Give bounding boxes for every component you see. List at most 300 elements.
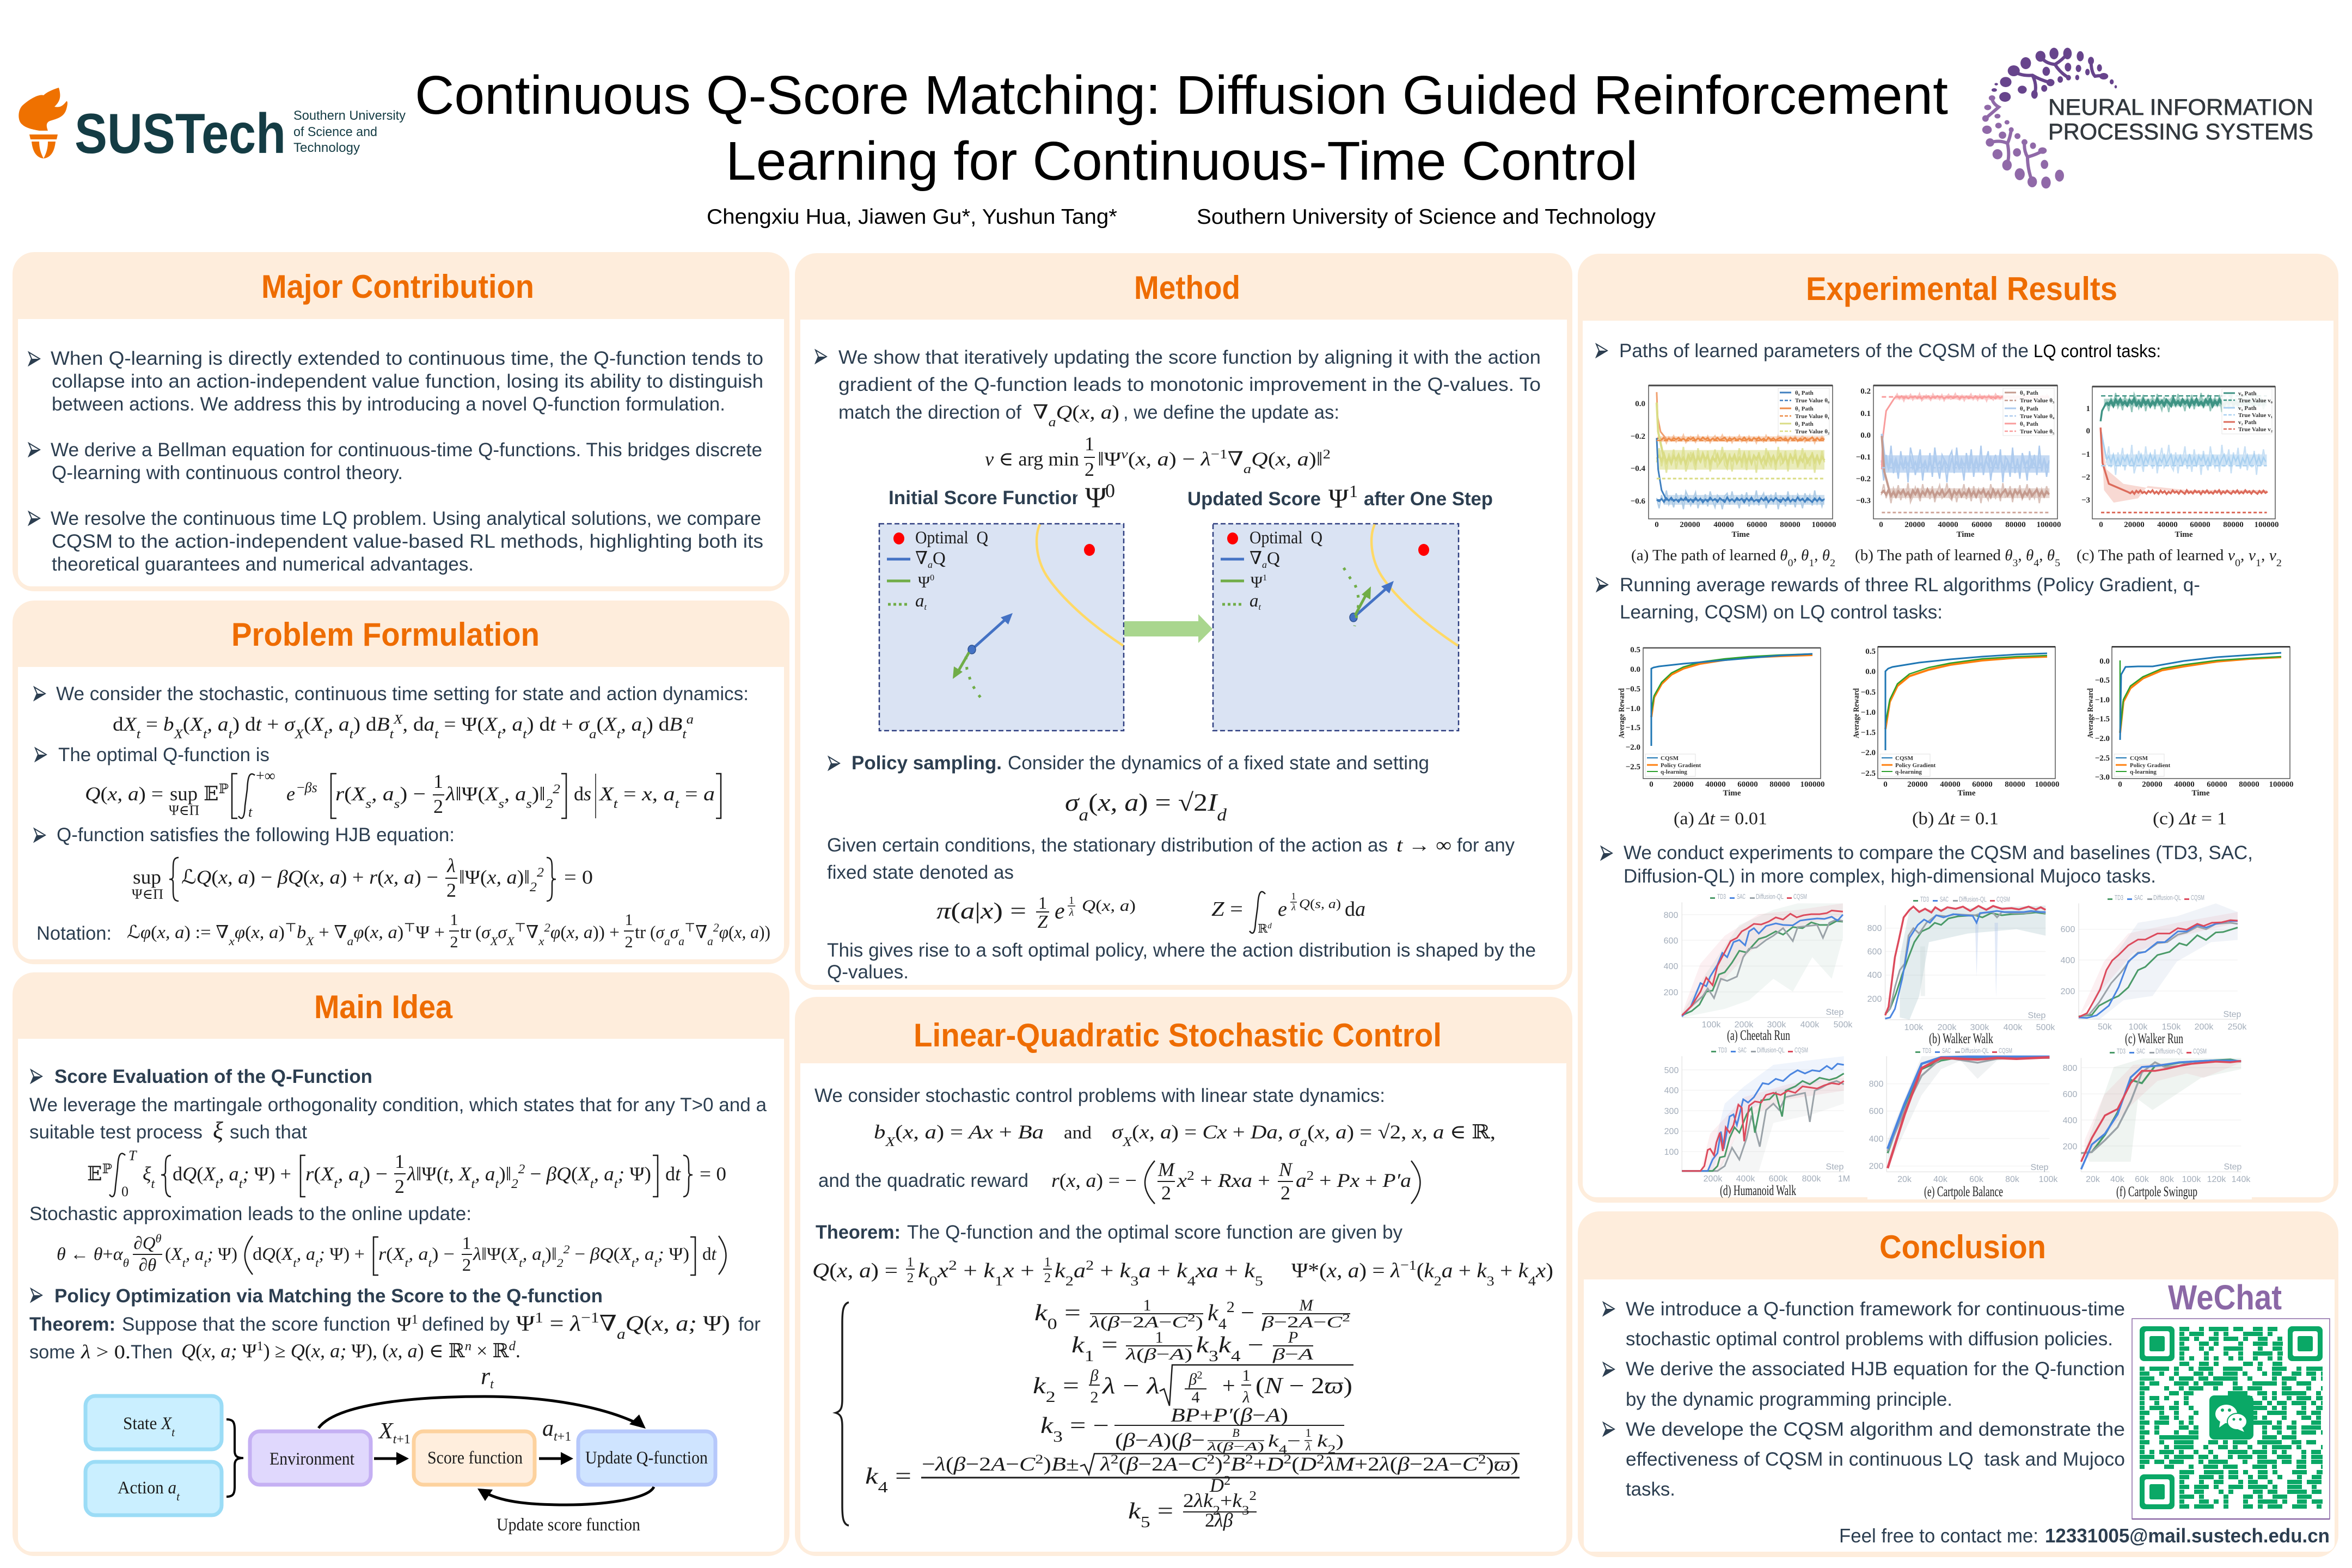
- chart: average reward dt 0.1: 40000: [1940, 780, 1961, 789]
- diagram: updated score: ∇: [1250, 549, 1262, 568]
- equation: stationary policy: 1: [1069, 895, 1074, 906]
- equation: optimal Q-function: −βs: [297, 780, 317, 795]
- box: Update Q-function: [578, 1431, 715, 1485]
- chart: Cheetah Run: 200: [1664, 988, 1678, 997]
- heading: Experimental Results: Experimental Results: [1806, 271, 2117, 307]
- chart: average reward dt 1: 40000: [2174, 780, 2195, 789]
- equation: optimal Q-function: Q(x, a) =: [85, 783, 163, 805]
- chart: average reward dt 1: Policy Gradient: [2130, 762, 2171, 769]
- equation: notation: 2: [450, 933, 458, 951]
- equation: k3: (β−A)(β−: [1115, 1429, 1205, 1451]
- chart: Walker Run: 250k: [2228, 1022, 2247, 1032]
- chart: path of theta 0,1,2: [1631, 385, 1836, 568]
- equation: optimal Q-function: t: [248, 804, 253, 820]
- chart: average reward dt 1: [2086, 647, 2293, 829]
- chart: average reward dt 0.01: (a) Δt = 0.01: [1674, 809, 1767, 829]
- text block: conclusions: We derive the associated HJB equation for the Q-function: [1626, 1358, 2125, 1380]
- chart: average reward dt 1: CQSM: [2130, 755, 2148, 762]
- text block: policy optimization theorem: [29, 1285, 761, 1363]
- chart: average reward dt 0.01: −2.0: [1626, 743, 1640, 752]
- chart: Humanoid Walk: [1664, 1046, 1850, 1198]
- subheading: updated score: Ψ: [1328, 483, 1349, 513]
- equation: optimal Q-function: λ‖Ψ(Xs, as)‖22: [445, 782, 560, 811]
- legend: [1711, 1046, 1808, 1054]
- equation: k1: k3k4 −: [1196, 1333, 1264, 1364]
- equation: k3: λ (β − A ): [1206, 1440, 1264, 1453]
- panel: Conclusion: [1578, 1211, 2338, 1557]
- chart: Cartpole Swingup: 40k: [2110, 1175, 2125, 1184]
- chart: Cartpole Balance: 200: [1869, 1162, 1883, 1171]
- text block: policy optimization theorem: Ψ1 = λ−1∇aQ(x, a; Ψ): [516, 1309, 730, 1342]
- equation: HJB: [132, 855, 593, 902]
- legend: SAC: [1737, 892, 1745, 901]
- chart: path of theta 0,1,2: 80000: [1780, 520, 1800, 529]
- equation: k0: M: [1299, 1296, 1314, 1314]
- equation: HJB: sup: [133, 866, 161, 888]
- equation: martingale orthogonality: λ‖Ψ(t, Xt, at)‖22 − βQ(Xt, at; Ψ): [407, 1162, 651, 1191]
- text block: stochastic approximation: Stochastic approximation leads to the online update:: [29, 1203, 471, 1224]
- equation: quadratic reward: N: [1278, 1159, 1293, 1180]
- equation: k1: P: [1288, 1328, 1298, 1346]
- equation: notation: Notation:: [36, 923, 112, 944]
- equation: HJB: = 0: [564, 866, 593, 888]
- chart: path of theta 3,4,5: −0.2: [1856, 475, 1871, 483]
- chart: average reward dt 0.01: 20000: [1673, 780, 1694, 789]
- equation: k2: 4: [1191, 1388, 1200, 1406]
- equation: k4: λ2(β−2A−C2)2B2+D2(D2λM +2λ(β−2A−C2)ϖ): [1100, 1451, 1518, 1475]
- chart: Cartpole Swingup: 400: [2063, 1116, 2077, 1125]
- equation: k2: β: [1090, 1367, 1099, 1385]
- equation: martingale orthogonality: dt: [665, 1163, 681, 1185]
- equation: HJB: ‖Ψ(x, a)‖22: [459, 865, 544, 894]
- chart: average reward dt 0.01: −0.5: [1626, 685, 1640, 694]
- text block: HJB: Q-function satisfies the following HJB equation:: [57, 824, 455, 846]
- chart: Cartpole Balance: 60k: [1969, 1175, 1984, 1184]
- text block: soft optimal policy: Q-values.: [827, 961, 909, 983]
- chart: Cartpole Balance: 80k: [2005, 1175, 2020, 1184]
- arrow: initial to updated: [1124, 614, 1212, 643]
- equation: k5: 2λk2+k32: [1183, 1489, 1257, 1518]
- text block: score evaluation: We leverage the martingale orthogonality condition, which states that for any T>0 and a: [29, 1094, 767, 1116]
- equation: HJB: Ψ∈Π: [132, 886, 163, 902]
- chart: Humanoid Walk: 200k: [1704, 1174, 1723, 1184]
- chart: average reward dt 0.01: 0.5: [1630, 646, 1640, 654]
- legend: [1710, 892, 1807, 901]
- equation: k3: k2): [1317, 1431, 1344, 1456]
- logo: SUSTech: [19, 88, 406, 166]
- text block: stationary distribution: Given certain conditions, the stationary distribution of the action as: [827, 835, 1388, 856]
- equation: k1: k1 =: [1071, 1333, 1118, 1364]
- equation: k2: λ: [1242, 1388, 1250, 1406]
- chart: path of theta 3,4,5: [1855, 385, 2061, 568]
- equation: Q-function and optimal score: 1: [907, 1255, 914, 1270]
- chart: Cartpole Balance: 100k: [2039, 1175, 2058, 1184]
- panel: Major Contribution: [13, 252, 789, 591]
- chart: path of theta 3,4,5: 60000: [1971, 520, 1992, 529]
- equation: k3: 1: [1306, 1426, 1311, 1440]
- chart: Walker Run: 150k: [2162, 1022, 2181, 1032]
- chart: path of theta 3,4,5: True Value θ₄: [2020, 413, 2055, 420]
- equation: k3: [1040, 1404, 1344, 1456]
- text block: LQ theorem: Theorem:: [816, 1222, 901, 1243]
- label: a t+1: +1: [558, 1430, 571, 1444]
- text block: conclusions: [1603, 1298, 2125, 1500]
- chart: path of theta 3,4,5: 0: [1879, 520, 1883, 529]
- text block: Mujoco experiments: Diffusion-QL) in more complex, high-dimensional Mujoco tasks.: [1624, 866, 2156, 887]
- chart: average reward dt 0.01: 100000: [1800, 780, 1825, 789]
- label: X t+1: +1: [396, 1432, 411, 1447]
- equation: k4: −λ(β−2A−C2)B±: [922, 1451, 1079, 1475]
- text block: conclusions: We develope the CQSM algorithm and demonstrate the: [1626, 1419, 2125, 1440]
- chart: path of v 0,1,2: v₂ Path: [2238, 419, 2257, 426]
- chart: average reward dt 0.01: 80000: [1769, 780, 1790, 789]
- chart: path of theta 3,4,5: θ₄ Path: [2020, 406, 2038, 412]
- legend: TD3: [1920, 895, 1929, 903]
- chart: Cartpole Swingup: 100k: [2182, 1175, 2201, 1184]
- equation: online update: θ ← θ+αθ: [57, 1245, 129, 1270]
- equation: online update: ∂Qθ: [133, 1232, 162, 1253]
- diagram: updated score: Q: [1267, 549, 1280, 568]
- chart: Cheetah Run: Step: [1826, 1008, 1844, 1017]
- chart: average reward dt 1: 80000: [2239, 780, 2259, 789]
- chart: Cartpole Swingup: (f) Cartpole Swingup: [2116, 1184, 2197, 1199]
- chart: path of theta 3,4,5: 40000: [1938, 520, 1958, 529]
- chart: path of v 0,1,2: True Value v₂: [2238, 426, 2273, 433]
- equation: optimal Q-function: sup: [170, 783, 198, 805]
- chart: average reward dt 1: (c) Δt = 1: [2153, 809, 2227, 829]
- equation: Q-function and optimal score: Q(x, a) =: [812, 1259, 898, 1282]
- title: [415, 65, 1948, 192]
- equation: Q-function and optimal score: 1: [1044, 1255, 1051, 1270]
- chart: path of v 0,1,2: v₁ Path: [2238, 405, 2257, 412]
- chart: Humanoid Walk: 800k: [1802, 1174, 1821, 1184]
- equation: k2: β2: [1188, 1369, 1203, 1388]
- text block: policy optimization theorem: some: [29, 1342, 75, 1363]
- equation: optimal Q-function: 𝔼ℙ: [204, 782, 229, 805]
- equation: Q-function and optimal score: 2: [907, 1271, 914, 1285]
- chart: Cheetah Run: 400: [1664, 962, 1678, 971]
- chart: average reward dt 1: 100000: [2269, 780, 2293, 789]
- subheading: updated score: after One Step: [1364, 488, 1493, 510]
- equation: k2: 2: [1090, 1388, 1099, 1406]
- chart: path of v 0,1,2: True Value v₀: [2238, 397, 2273, 404]
- chart: average reward dt 0.1: −0.5: [1861, 688, 1876, 697]
- text block: LQ intro: We consider stochastic control problems with linear state dynamics:: [814, 1085, 1385, 1106]
- equation: k3: k3 = −: [1040, 1413, 1109, 1445]
- legend: CQSM: [1999, 1046, 2012, 1055]
- equation: k2: +: [1222, 1374, 1235, 1399]
- chart: Cartpole Swingup: 600: [2063, 1090, 2077, 1099]
- legend: CQSM: [2193, 1047, 2207, 1055]
- equation: k2: 1: [1242, 1367, 1250, 1385]
- chart: Cartpole Swingup: [2063, 1047, 2251, 1199]
- text block: contribution bullets: Q-learning with continuous control theory.: [52, 462, 403, 483]
- chart: average reward dt 0.1: CQSM: [1895, 755, 1914, 762]
- equation: martingale orthogonality: [87, 1148, 726, 1199]
- legend: Diffusion-QL: [1959, 895, 1987, 903]
- text block: score update: gradient of the Q-function leads to monotonic improvement in the Q-values. To: [838, 374, 1541, 395]
- subheading: updated score: [1187, 481, 1493, 513]
- logo: SUSTech: Southern University: [293, 108, 406, 123]
- text block: score evaluation: Score Evaluation of the Q-Function: [54, 1066, 372, 1087]
- equation: k3: BP +P′(β−A): [1171, 1404, 1288, 1426]
- arrow: score to update: [539, 1452, 573, 1465]
- heading: Problem Formulation: Problem Formulation: [231, 616, 540, 653]
- chart: Cartpole Balance: 400: [1869, 1135, 1883, 1144]
- label: r t: t: [490, 1377, 494, 1392]
- chart: average reward dt 1: Time: [2191, 789, 2210, 798]
- equation: martingale orthogonality: r(Xt, at) −: [305, 1163, 388, 1191]
- equation: notation: 1: [450, 911, 458, 929]
- equation: k0: k42 −: [1208, 1299, 1254, 1333]
- chart: average reward dt 1: −0.5: [2095, 676, 2110, 685]
- legend: CQSM: [1793, 892, 1807, 901]
- equation: linear dynamics: σX(x, a) = Cx + Da, σ a(x, a) = √2, x, a ∈ ℝ,: [1112, 1121, 1496, 1149]
- chart: Walker Run: (c) Walker Run: [2125, 1031, 2183, 1046]
- chart: Cheetah Run: 800: [1664, 911, 1678, 920]
- equation: optimal Q-function: e: [286, 783, 295, 805]
- text block: contribution bullets: We derive a Bellman equation for continuous-time Q-functions. This bridges discrete: [51, 439, 762, 461]
- subheading: updated score: 1: [1349, 481, 1358, 501]
- text block: score update: , we define the update as:: [1123, 402, 1339, 423]
- chart: path of v 0,1,2: 20000: [2124, 520, 2145, 529]
- chart: average reward dt 0.1: 20000: [1907, 780, 1928, 789]
- equation: k1: 1: [1155, 1328, 1163, 1346]
- text block: paths of learned parameters: Paths of learned parameters of the CQSM of the: [1619, 340, 2029, 362]
- equation: online update: λ‖Ψ(Xt, at)‖22 − βQ(Xt, at; Ψ): [473, 1242, 689, 1270]
- chart: average reward dt 0.01: CQSM: [1661, 755, 1679, 762]
- box: Score function: [414, 1431, 535, 1485]
- box: Update Q-function: Update Q-function: [585, 1448, 708, 1468]
- chart: average reward dt 0.01: Policy Gradient: [1661, 762, 1701, 769]
- chart: average reward dt 0.1: 100000: [2035, 780, 2059, 789]
- diagram: initial score: Ψ: [918, 573, 930, 591]
- equation: stationary policy: π(a|x) =: [936, 899, 1026, 924]
- legend: [1915, 1046, 2012, 1055]
- equation: notation: (σaσa⊤∇a2φ(x, a)): [650, 920, 770, 947]
- chart: Humanoid Walk: (d) Humanoid Walk: [1720, 1183, 1796, 1198]
- text block: contribution bullets: [29, 348, 763, 575]
- equation: linear dynamics: and: [1064, 1123, 1092, 1143]
- chart: path of v 0,1,2: −2: [2081, 473, 2090, 482]
- chart: Humanoid Walk: 600k: [1769, 1174, 1788, 1184]
- chart: path of theta 0,1,2: θ₀ Path: [1795, 390, 1814, 396]
- equation: online update: dt: [702, 1245, 716, 1264]
- chart: path of v 0,1,2: 40000: [2157, 520, 2178, 529]
- legend: CQSM: [2191, 893, 2204, 902]
- equation: k1: β− A: [1272, 1345, 1314, 1363]
- text block: score evaluation: such that: [230, 1122, 307, 1143]
- chart: average reward dt 0.1: 0.5: [1865, 647, 1876, 656]
- panel: Linear-Quadratic Stochastic Control: [795, 997, 1572, 1556]
- contact line: Feel free to contact me:: [1839, 1524, 2038, 1547]
- equation: martingale orthogonality: = 0: [700, 1163, 726, 1185]
- text block: score update: We show that iteratively updating the score function by aligning it with the action: [838, 347, 1541, 368]
- flow diagram: score matching loop: [85, 1363, 715, 1535]
- equation: quadratic reward: a2 + Px + P′a: [1296, 1168, 1411, 1191]
- text block: score update: [816, 347, 1541, 429]
- equation: notation: (σXσX⊤∇x2φ(x, a)) +: [475, 920, 620, 947]
- text block: score evaluation: [29, 1066, 767, 1144]
- chart: Walker Run: [2061, 893, 2247, 1046]
- icon: WeChat logo: [2209, 1395, 2253, 1440]
- label: X t+1: t: [393, 1432, 397, 1447]
- chart: Cartpole Swingup: 200: [2063, 1142, 2077, 1152]
- equation: stationary policy: λ: [1291, 902, 1296, 912]
- chart: path of v 0,1,2: 1: [2086, 405, 2090, 413]
- legend: SAC: [2134, 893, 2143, 902]
- logo: SUSTech: SUSTech: [75, 102, 286, 166]
- chart: Cheetah Run: 500k: [1834, 1020, 1853, 1030]
- chart: Cartpole Balance: Step: [2031, 1163, 2049, 1172]
- label: a t+1: a: [542, 1416, 554, 1441]
- chart: Cartpole Balance: 40k: [1933, 1175, 1948, 1184]
- diagram: updated score: a: [1262, 559, 1267, 570]
- chart: Walker Walk: (b) Walker Walk: [1929, 1031, 1993, 1046]
- chart: Cartpole Swingup: 80k: [2160, 1175, 2175, 1184]
- chart: Humanoid Walk: 400: [1664, 1086, 1679, 1095]
- diagram: updated score: 1: [1263, 573, 1267, 583]
- chart: average reward dt 0.1: Policy Gradient: [1895, 762, 1936, 769]
- equation: online update: 2: [462, 1255, 471, 1275]
- text block: contribution bullets: CQSM to the action-independent value-based RL methods, highlighting both its: [52, 531, 763, 552]
- equation: k1: [1071, 1328, 1314, 1364]
- equation: notation: 2: [625, 933, 633, 951]
- equation: Q-function and optimal score: k0x2 + k1x +: [918, 1257, 1034, 1288]
- logo: NeurIPS: [1982, 48, 2313, 188]
- chart: Humanoid Walk: 200: [1664, 1127, 1679, 1136]
- chart: path of v 0,1,2: 0: [2086, 427, 2090, 436]
- equation: notation: [36, 911, 770, 951]
- chart: path of theta 0,1,2: True Value θ₀: [1795, 397, 1830, 404]
- equation: stationary policy: 1: [1038, 893, 1047, 912]
- chart: Cartpole Swingup: 140k: [2232, 1175, 2251, 1184]
- logo: SUSTech: of Science and: [293, 125, 377, 139]
- legend: TD3: [1922, 1046, 1931, 1055]
- chart: average reward dt 0.1: Average Reward: [1852, 688, 1861, 738]
- equation: k2: (N − 2ϖ): [1255, 1374, 1352, 1399]
- text block: policy sampling: Consider the dynamics of a fixed state and setting: [1008, 752, 1429, 774]
- equation: martingale orthogonality: ξt: [143, 1163, 155, 1191]
- text block: contribution bullets: between actions. We address this by introducing a novel Q-function formulation.: [52, 394, 725, 415]
- heading: Method: Method: [1134, 270, 1240, 306]
- equation: notation: 1: [625, 911, 633, 929]
- diagram: updated score: t: [1259, 603, 1261, 612]
- text block: running average rewards: Running average rewards of three RL algorithms (Policy Gradient, q-: [1620, 574, 2200, 596]
- legend: Diffusion-QL: [2153, 893, 2181, 902]
- equation: k4: [865, 1451, 1520, 1496]
- text block: stationary distribution: t → ∞: [1396, 834, 1451, 856]
- legend: Diffusion-QL: [1756, 892, 1784, 901]
- text block: conclusions: by the dynamic programming principle.: [1626, 1389, 1952, 1410]
- chart: path of v 0,1,2: −3: [2081, 496, 2090, 505]
- logo: NeurIPS: NEURAL INFORMATION: [2048, 94, 2313, 120]
- equation: online update: ∂θ: [139, 1255, 156, 1275]
- chart: path of theta 0,1,2: 0.0: [1635, 400, 1645, 408]
- legend: CQSM: [1794, 1046, 1808, 1054]
- equation: quadratic reward: r(x, a) = −: [1051, 1169, 1137, 1191]
- equation: k2: k2 =: [1033, 1374, 1079, 1406]
- equation: k5: k5 =: [1128, 1499, 1173, 1531]
- chart: average reward dt 0.01: Average Reward: [1618, 688, 1626, 738]
- diagram: initial score: [879, 524, 1124, 731]
- equation: stationary policy: [936, 891, 1365, 935]
- chart: average reward dt 0.01: 0: [1649, 780, 1653, 789]
- diagram: initial score: t: [924, 603, 927, 612]
- heading: LQ control: Linear-Quadratic Stochastic Control: [914, 1017, 1442, 1054]
- text block: contribution bullets: theoretical guarantees and numerical advantages.: [52, 554, 474, 575]
- chart: average reward dt 1: −2.5: [2095, 754, 2110, 763]
- subheading: initial score function: Ψ: [1085, 481, 1107, 514]
- panel: Problem Formulation: [13, 601, 789, 964]
- equation: optimal Q-function: Xt = x, a t = a: [598, 783, 715, 811]
- chart: average reward dt 0.1: −2.5: [1861, 769, 1876, 778]
- chart: average reward dt 1: 0.0: [2099, 657, 2110, 666]
- box: Environment: [250, 1431, 371, 1485]
- chart: path of v 0,1,2: 80000: [2223, 520, 2244, 529]
- authors and affiliation: Chengxiu Hua, Jiawen Gu*, Yushun Tang*: [707, 205, 1117, 229]
- chart: Walker Walk: 400k: [2004, 1023, 2023, 1032]
- chart: Cartpole Swingup: 60k: [2135, 1175, 2149, 1184]
- chart: path of theta 0,1,2: θ₁ Path: [1795, 406, 1814, 412]
- legend: SAC: [1942, 1046, 1951, 1055]
- chart: Walker Run: 400: [2061, 956, 2075, 965]
- chart: path of theta 3,4,5: θ₃ Path: [2020, 390, 2038, 396]
- chart: path of v 0,1,2: Time: [2175, 530, 2193, 539]
- chart: Cheetah Run: 200k: [1735, 1020, 1754, 1030]
- equation: quadratic reward: 2: [1281, 1182, 1290, 1204]
- text block: policy optimization theorem: Ψ1: [397, 1312, 418, 1335]
- chart: Cheetah Run: 600: [1664, 936, 1678, 946]
- equation: k5: [1128, 1489, 1257, 1531]
- legend: [1913, 895, 2010, 903]
- diagram: updated score: Ψ: [1251, 573, 1263, 591]
- diagram: initial score: a: [928, 559, 933, 570]
- arrow: environment to score: [374, 1452, 409, 1465]
- authors and affiliation: [707, 205, 1656, 229]
- box: State: State Xt: [123, 1414, 175, 1438]
- chart: path of theta 3,4,5: (b) The path of learned θ3, θ4, θ5: [1855, 547, 2060, 568]
- heading: Conclusion: Conclusion: [1879, 1229, 2046, 1265]
- panel: Main Idea: [13, 972, 789, 1556]
- equation: quadratic reward: M: [1157, 1159, 1175, 1180]
- QR code: WeChat: [2132, 1319, 2330, 1519]
- equation: Q-function and optimal score: 2: [1044, 1271, 1051, 1285]
- chart: average reward dt 0.1: −1.5: [1861, 728, 1876, 737]
- chart: Cartpole Swingup: 20k: [2086, 1175, 2100, 1184]
- equation: online update: [57, 1232, 726, 1275]
- text block: policy sampling: Policy sampling.: [852, 752, 1002, 774]
- equation: online update: 1: [462, 1234, 471, 1253]
- equation: online update: dQ(Xt, at; Ψ) +: [253, 1245, 365, 1270]
- chart: average reward dt 0.01: 0.0: [1630, 665, 1640, 674]
- text block: soft optimal policy: [827, 940, 1536, 983]
- chart: path of v 0,1,2: v₀ Path: [2238, 390, 2257, 397]
- diagram: updated score: a: [1250, 591, 1259, 611]
- contact line: 12331005@mail.sustech.edu.cn: [2045, 1524, 2330, 1547]
- chart: average reward dt 0.01: 40000: [1705, 780, 1726, 789]
- chart: Cartpole Balance: 20k: [1897, 1175, 1912, 1184]
- text block: stationary distribution: for any: [1457, 835, 1515, 856]
- QR finder: top left: [2140, 1326, 2175, 1361]
- chart: Humanoid Walk: 500: [1664, 1066, 1679, 1075]
- text block: conclusions: stochastic optimal control problems with diffusion policies.: [1626, 1328, 2113, 1350]
- subheading: initial score function: [889, 480, 1115, 514]
- chart: Walker Run: Step: [2224, 1010, 2241, 1019]
- chart: path of theta 3,4,5: θ₅ Path: [2020, 421, 2038, 427]
- brace: [226, 1419, 243, 1497]
- chart: Cartpole Swingup: Step: [2224, 1162, 2242, 1172]
